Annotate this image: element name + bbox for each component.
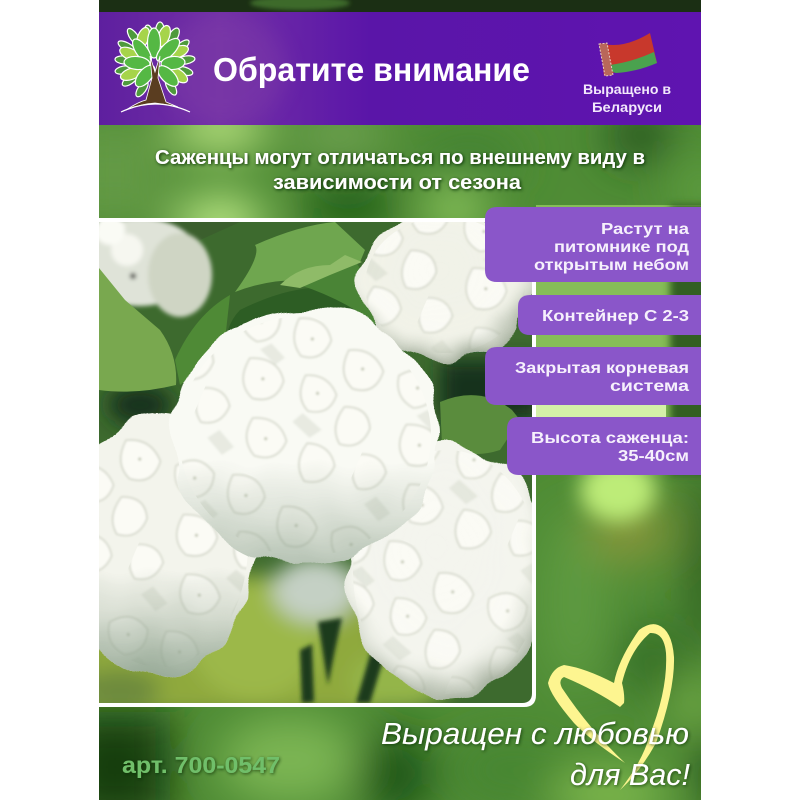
slogan: Выращен с любовью для Вас!: для Вас! [570,757,690,792]
article number: арт. 700-0547 [122,752,280,778]
leaf: large left leaf [99,268,176,392]
photo: white snowball viburnum flowers in white frame [99,218,536,707]
notice text: Саженцы могут отличаться по внешнему виду в [155,146,645,169]
flower: top right [359,210,531,360]
pill: seedling height: 35-40см [618,448,689,465]
badge text: Выращено в Беларуси: Беларуси [592,100,662,115]
flower: lower right [347,444,547,700]
pill: closed root system [485,347,701,405]
pill: seedling height [507,417,701,475]
notice text [155,146,645,194]
badge text: Выращено в Беларуси [583,82,671,115]
stems [300,618,385,703]
heading: Обратите внимание: Обратите внимание [213,51,530,88]
pill: grown in open air: питомнике под [554,239,689,256]
icon: Belarus flag [599,33,657,76]
pill: seedling height: Высота саженца: [531,430,689,447]
page background: blurred green foliage [99,0,701,800]
pill: grown in open air: Растут на [601,221,689,238]
flower: central [171,308,439,564]
pill: grown in open air [485,207,701,282]
flower: top left (out of focus) [99,222,216,320]
header banner [99,12,701,125]
icon: tree logo [114,22,196,112]
pill: closed root system: система [610,378,689,395]
top dark strip [99,0,701,13]
leaves [171,222,518,454]
slogan: Выращен с любовью для Вас!: Выращен с любовью [381,716,689,751]
panel: feature pills [485,207,701,475]
notice text: зависимости от сезона [273,171,522,194]
pill: container size: Контейнер С 2-3 [542,308,689,325]
photo frame [99,218,536,707]
pill: container size [518,295,701,335]
pill: closed root system: Закрытая корневая [515,360,689,377]
slogan: Выращен с любовью для Вас! [381,716,690,792]
badge text: Выращено в Беларуси: Выращено в [583,82,671,97]
flower: lower left [99,413,256,678]
bright gaps between pills [536,205,701,417]
pill: grown in open air: открытым небом [534,257,689,274]
icon: hand-drawn yellow heart [548,624,674,790]
